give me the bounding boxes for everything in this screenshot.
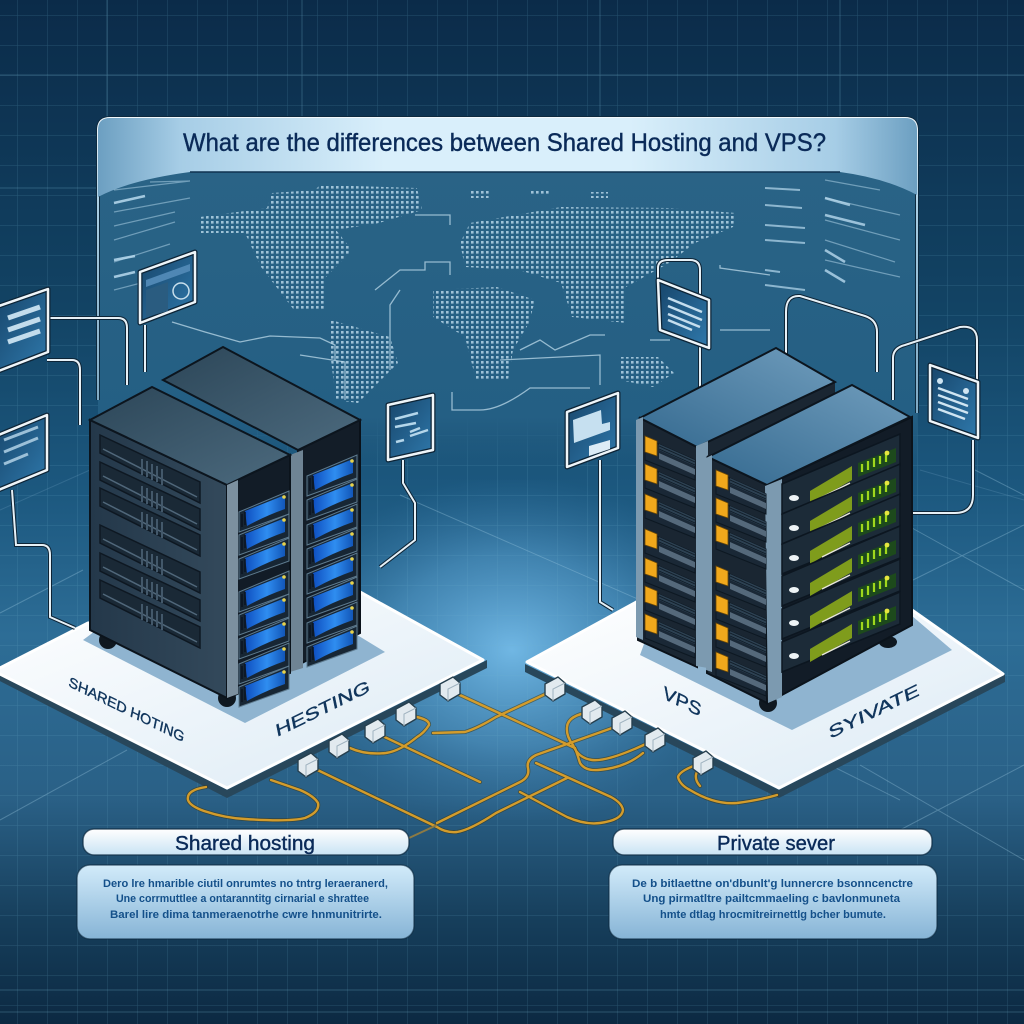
icon: card centre left [388,395,433,460]
panel: shared hosting description [77,865,414,939]
platform label: hosting: HESTING [274,677,371,741]
circuit lines [172,215,770,410]
panel: private server description [609,865,937,939]
icon: card far left [0,289,48,372]
private server heading: Private sever [717,833,835,855]
server: vps [636,348,912,712]
server: shared hosting [90,347,360,707]
private server body text: Ung pirmatltre pailtcmmaeling c bavlonmuneta [643,893,901,905]
panel: private server label [613,829,932,855]
icon: card top right [658,280,709,348]
platform label: shared hosting: SHARED HOTING [67,673,186,745]
private server body text: hmte dtlag hrocmitreirnettlg bcher bumute. [660,909,886,921]
icon: card lower left [0,415,47,491]
data text strokes [114,180,900,290]
left platform [0,592,487,798]
panel: title and world map [98,118,917,470]
private server body text: De b bitlaettne on'dbunlt'g lunnercre bsonncenctre [632,878,913,890]
cable connectors [298,677,713,777]
front rack [90,387,290,707]
shared hosting body text: Une corrmuttlee a ontaranntitg cirnarial e shrattee [116,893,369,905]
network cables [188,690,777,838]
shared hosting heading: Shared hosting [175,833,315,855]
right platform [525,600,1005,798]
icon: card centre right [567,393,618,467]
front rack [706,385,912,712]
connection lines to cards [12,260,977,628]
back rack [636,348,835,668]
back rack [163,347,360,672]
panel: shared hosting label [83,829,409,855]
shared hosting body text: Dero lre hmarible ciutil onrumtes no tntrg leraeranerd, [103,878,388,890]
icon: card top left [140,252,195,323]
private server body text [632,878,913,921]
platform label: private: SYIVATE [827,680,921,743]
title: What are the differences between Shared Hosting and VPS? [183,129,826,157]
world map [200,185,736,403]
shared hosting body text: Barel lire dima tanmeraenotrhe cwre hnmunitrirte. [110,909,382,921]
shared hosting body text [103,878,388,921]
icon: card far right [930,365,978,438]
platform label: vps: VPS [661,682,703,720]
title band [98,118,917,198]
